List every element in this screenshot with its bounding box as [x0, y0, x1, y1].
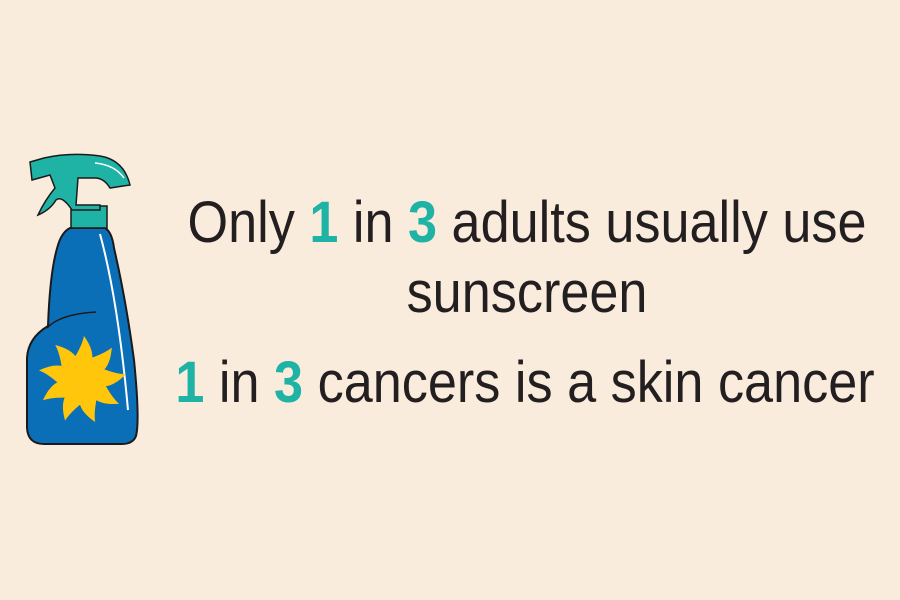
- sun: [37, 336, 127, 425]
- collar: [71, 206, 107, 228]
- icon: spray bottle: [26, 154, 139, 445]
- text: line 2: sunscreen: [407, 260, 647, 325]
- trigger head: [30, 154, 130, 215]
- bottle body: [27, 228, 138, 444]
- text: line 3: 1 in 3 cancers is a skin cancer: [175, 350, 875, 415]
- text: line 1: Only 1 in 3 adults usually use: [187, 190, 867, 255]
